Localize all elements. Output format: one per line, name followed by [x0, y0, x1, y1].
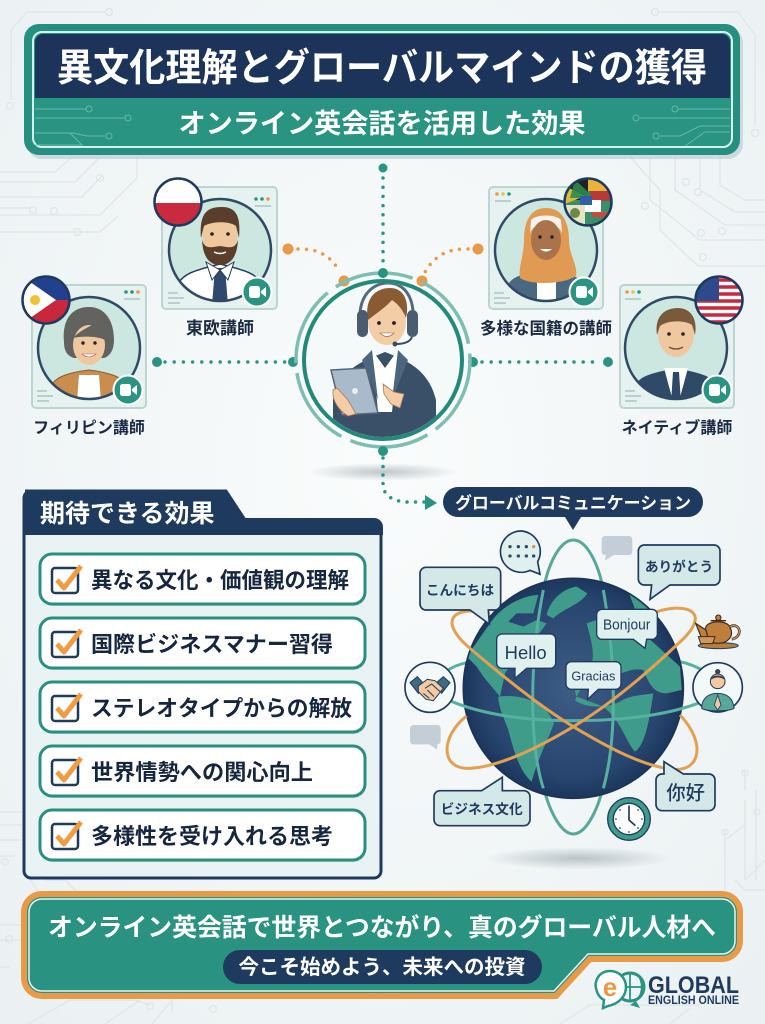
icon: bowing person [693, 663, 742, 712]
icon: check [52, 694, 81, 721]
teacher card: Philippines [22, 276, 146, 408]
bubble: ビジネス文化 [434, 777, 530, 826]
footer headline: オンライン英会話で世界とつながり、真のグローバル人材へ [48, 913, 716, 942]
icon: handshake [405, 662, 455, 712]
orbit lines in front [430, 590, 723, 788]
icon: teapot [696, 615, 739, 649]
effect item 4 [40, 746, 366, 798]
effect item 1: 異なる文化・価値観の理解 [91, 568, 349, 593]
subtitle: オンライン英会話を活用した効果 [178, 109, 586, 139]
bubble: Gracias: Gracias [571, 669, 616, 684]
central learner with headset and tablet [296, 268, 470, 456]
bubble: 你好: 你好 [666, 777, 705, 805]
effect item 2 [40, 618, 366, 670]
bubble: Gracias [566, 662, 621, 699]
bubble: Hello [497, 634, 556, 678]
icon: check [52, 822, 81, 849]
icon: video badge [242, 278, 272, 306]
header banner [24, 24, 743, 159]
effect item 2: 国際ビジネスマナー習得 [91, 632, 333, 657]
bubble: ビジネス文化: ビジネス文化 [441, 801, 523, 817]
icon: mixed flags [564, 178, 612, 226]
effect item 5 [40, 810, 366, 862]
teacher card: diverse nationalities [489, 178, 612, 309]
effect item 3: ステレオタイプからの解放 [91, 696, 352, 721]
bubble: dots [500, 531, 540, 574]
effect item 1 [40, 554, 366, 606]
bubble: ありがとう [638, 545, 720, 599]
icon: video badge [570, 278, 598, 306]
footer pill [223, 950, 542, 984]
icon: clock [608, 798, 650, 840]
effect item 4: 世界情勢への関心向上 [91, 760, 313, 785]
icon: Poland flag [154, 178, 202, 227]
effect item 3 [40, 682, 366, 734]
arrow to global communication [383, 458, 437, 510]
label: Eastern Europe: 東欧講師 [186, 319, 254, 338]
logo: ENGLISH ONLINE [648, 993, 739, 1007]
panel: expected effects [23, 490, 383, 878]
logo: GLOBAL [648, 972, 739, 999]
label: native: ネイティブ講師 [622, 418, 732, 437]
bubble: gray left [410, 725, 441, 749]
icon: check [52, 630, 81, 657]
bubble: gray top [602, 536, 632, 560]
bubble: Bonjour [597, 609, 657, 648]
teacher card: Eastern Europe [154, 178, 277, 310]
label: Philippines: フィリピン講師 [33, 418, 145, 437]
footer pill: 今こそ始めよう、未来への投資 [238, 956, 526, 979]
icon: check [52, 758, 81, 785]
globe illustration [405, 531, 742, 870]
footer banner [24, 894, 740, 996]
bubble: Hello: Hello [505, 642, 547, 663]
icon: video badge [114, 376, 142, 404]
orbit lines behind globe [430, 662, 723, 688]
bubble: Bonjour: Bonjour [603, 617, 650, 633]
bubble: こんにちは: こんにちは [426, 583, 494, 598]
effect item 5: 多様性を受け入れる思考 [91, 824, 333, 849]
icon: video badge [702, 376, 732, 404]
shadow below learner [308, 463, 458, 481]
teacher card: native [620, 276, 743, 408]
icon: logo globe and e [596, 971, 644, 1008]
globe [463, 578, 683, 798]
label: diverse nationalities: 多様な国籍の講師 [480, 318, 612, 338]
icon: USA flag [695, 276, 743, 324]
bubble: 你好 [656, 762, 715, 811]
bubble: こんにちは [420, 567, 501, 624]
global communication pill: グローバルコミュニケーション [455, 493, 691, 513]
connector dotted lines [152, 164, 613, 367]
icon: logo globe and e: e [603, 972, 617, 1002]
global communication pill [443, 487, 703, 530]
logo [596, 971, 739, 1008]
panel heading: 期待できる効果 [40, 500, 215, 528]
bubble: ありがとう: ありがとう [645, 558, 713, 574]
icon: Philippines flag [22, 276, 70, 324]
icon: check [52, 566, 81, 593]
main title: 異文化理解とグローバルマインドの獲得 [57, 47, 707, 90]
